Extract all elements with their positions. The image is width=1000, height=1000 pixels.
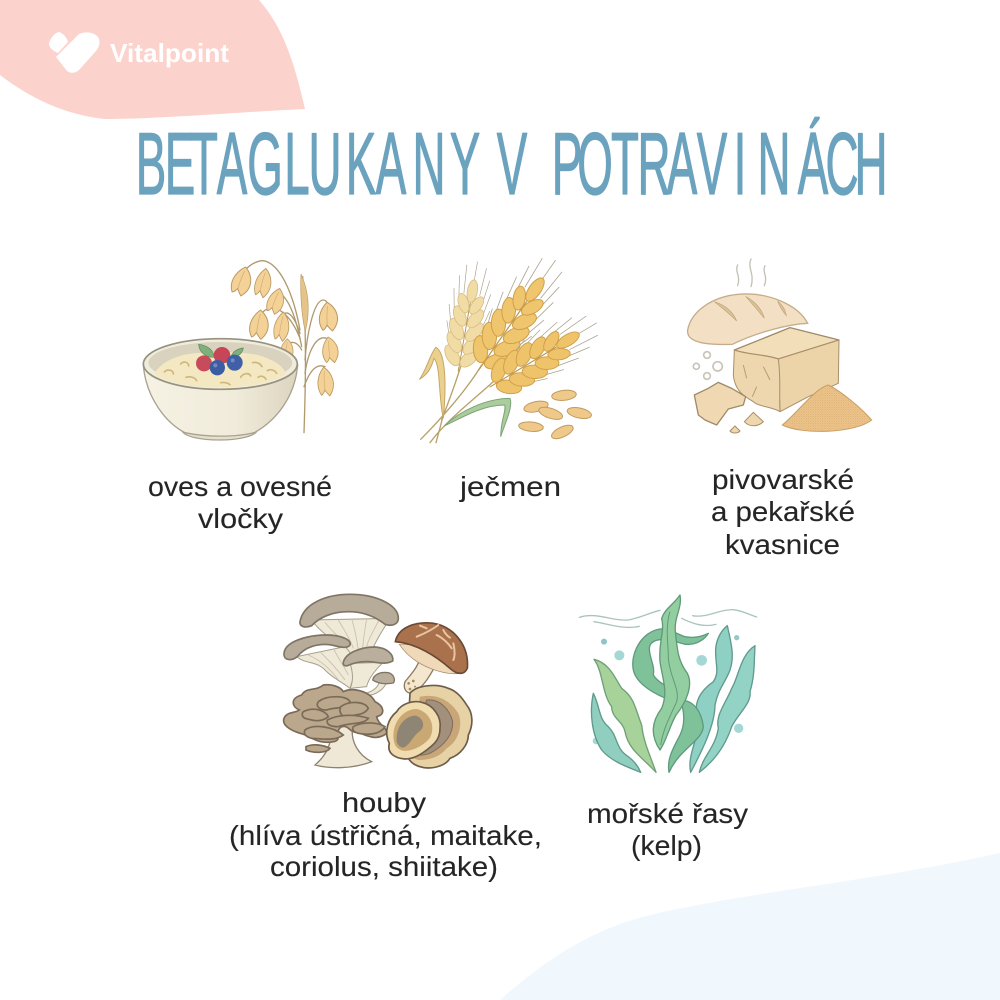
label: mushrooms: (hlíva ústřičná, maitake, xyxy=(229,820,542,851)
label: oats xyxy=(148,471,332,534)
panel: barley xyxy=(419,246,609,502)
pink corner shape xyxy=(0,0,305,119)
label: oats: oves a ovesné xyxy=(148,471,332,502)
title: BETAGLUKANY V POTRAVINÁCH xyxy=(136,115,888,213)
label: mushrooms: coriolus, shiitake) xyxy=(270,851,498,882)
panel: oats xyxy=(143,261,340,534)
label: seaweed: (kelp) xyxy=(631,830,702,861)
label: seaweed: mořské řasy xyxy=(587,798,748,829)
label: barley: ječmen xyxy=(459,471,561,502)
icon: heart logo xyxy=(49,32,99,73)
blue corner shape xyxy=(500,853,1000,1000)
label: seaweed xyxy=(587,798,748,861)
label: yeast: a pekařské xyxy=(711,496,855,527)
icon: mushroom cluster xyxy=(284,594,472,768)
icon: bread, yeast block and powder xyxy=(688,259,872,433)
label: yeast: pivovarské xyxy=(712,464,854,495)
panel: seaweed xyxy=(579,595,757,861)
panel: yeast xyxy=(688,259,872,560)
panel: mushrooms xyxy=(229,594,542,882)
logo: Vitalpoint xyxy=(49,32,229,73)
icon: barley ears and grains xyxy=(419,246,609,443)
label: yeast xyxy=(711,464,855,560)
label: mushrooms xyxy=(229,787,542,882)
brand name: Vitalpoint xyxy=(110,38,229,68)
icon: oat plant and porridge bowl xyxy=(143,261,340,440)
label: mushrooms: houby xyxy=(342,787,426,818)
label: yeast: kvasnice xyxy=(725,529,840,560)
label: oats: vločky xyxy=(198,503,283,534)
icon: kelp xyxy=(579,595,757,772)
